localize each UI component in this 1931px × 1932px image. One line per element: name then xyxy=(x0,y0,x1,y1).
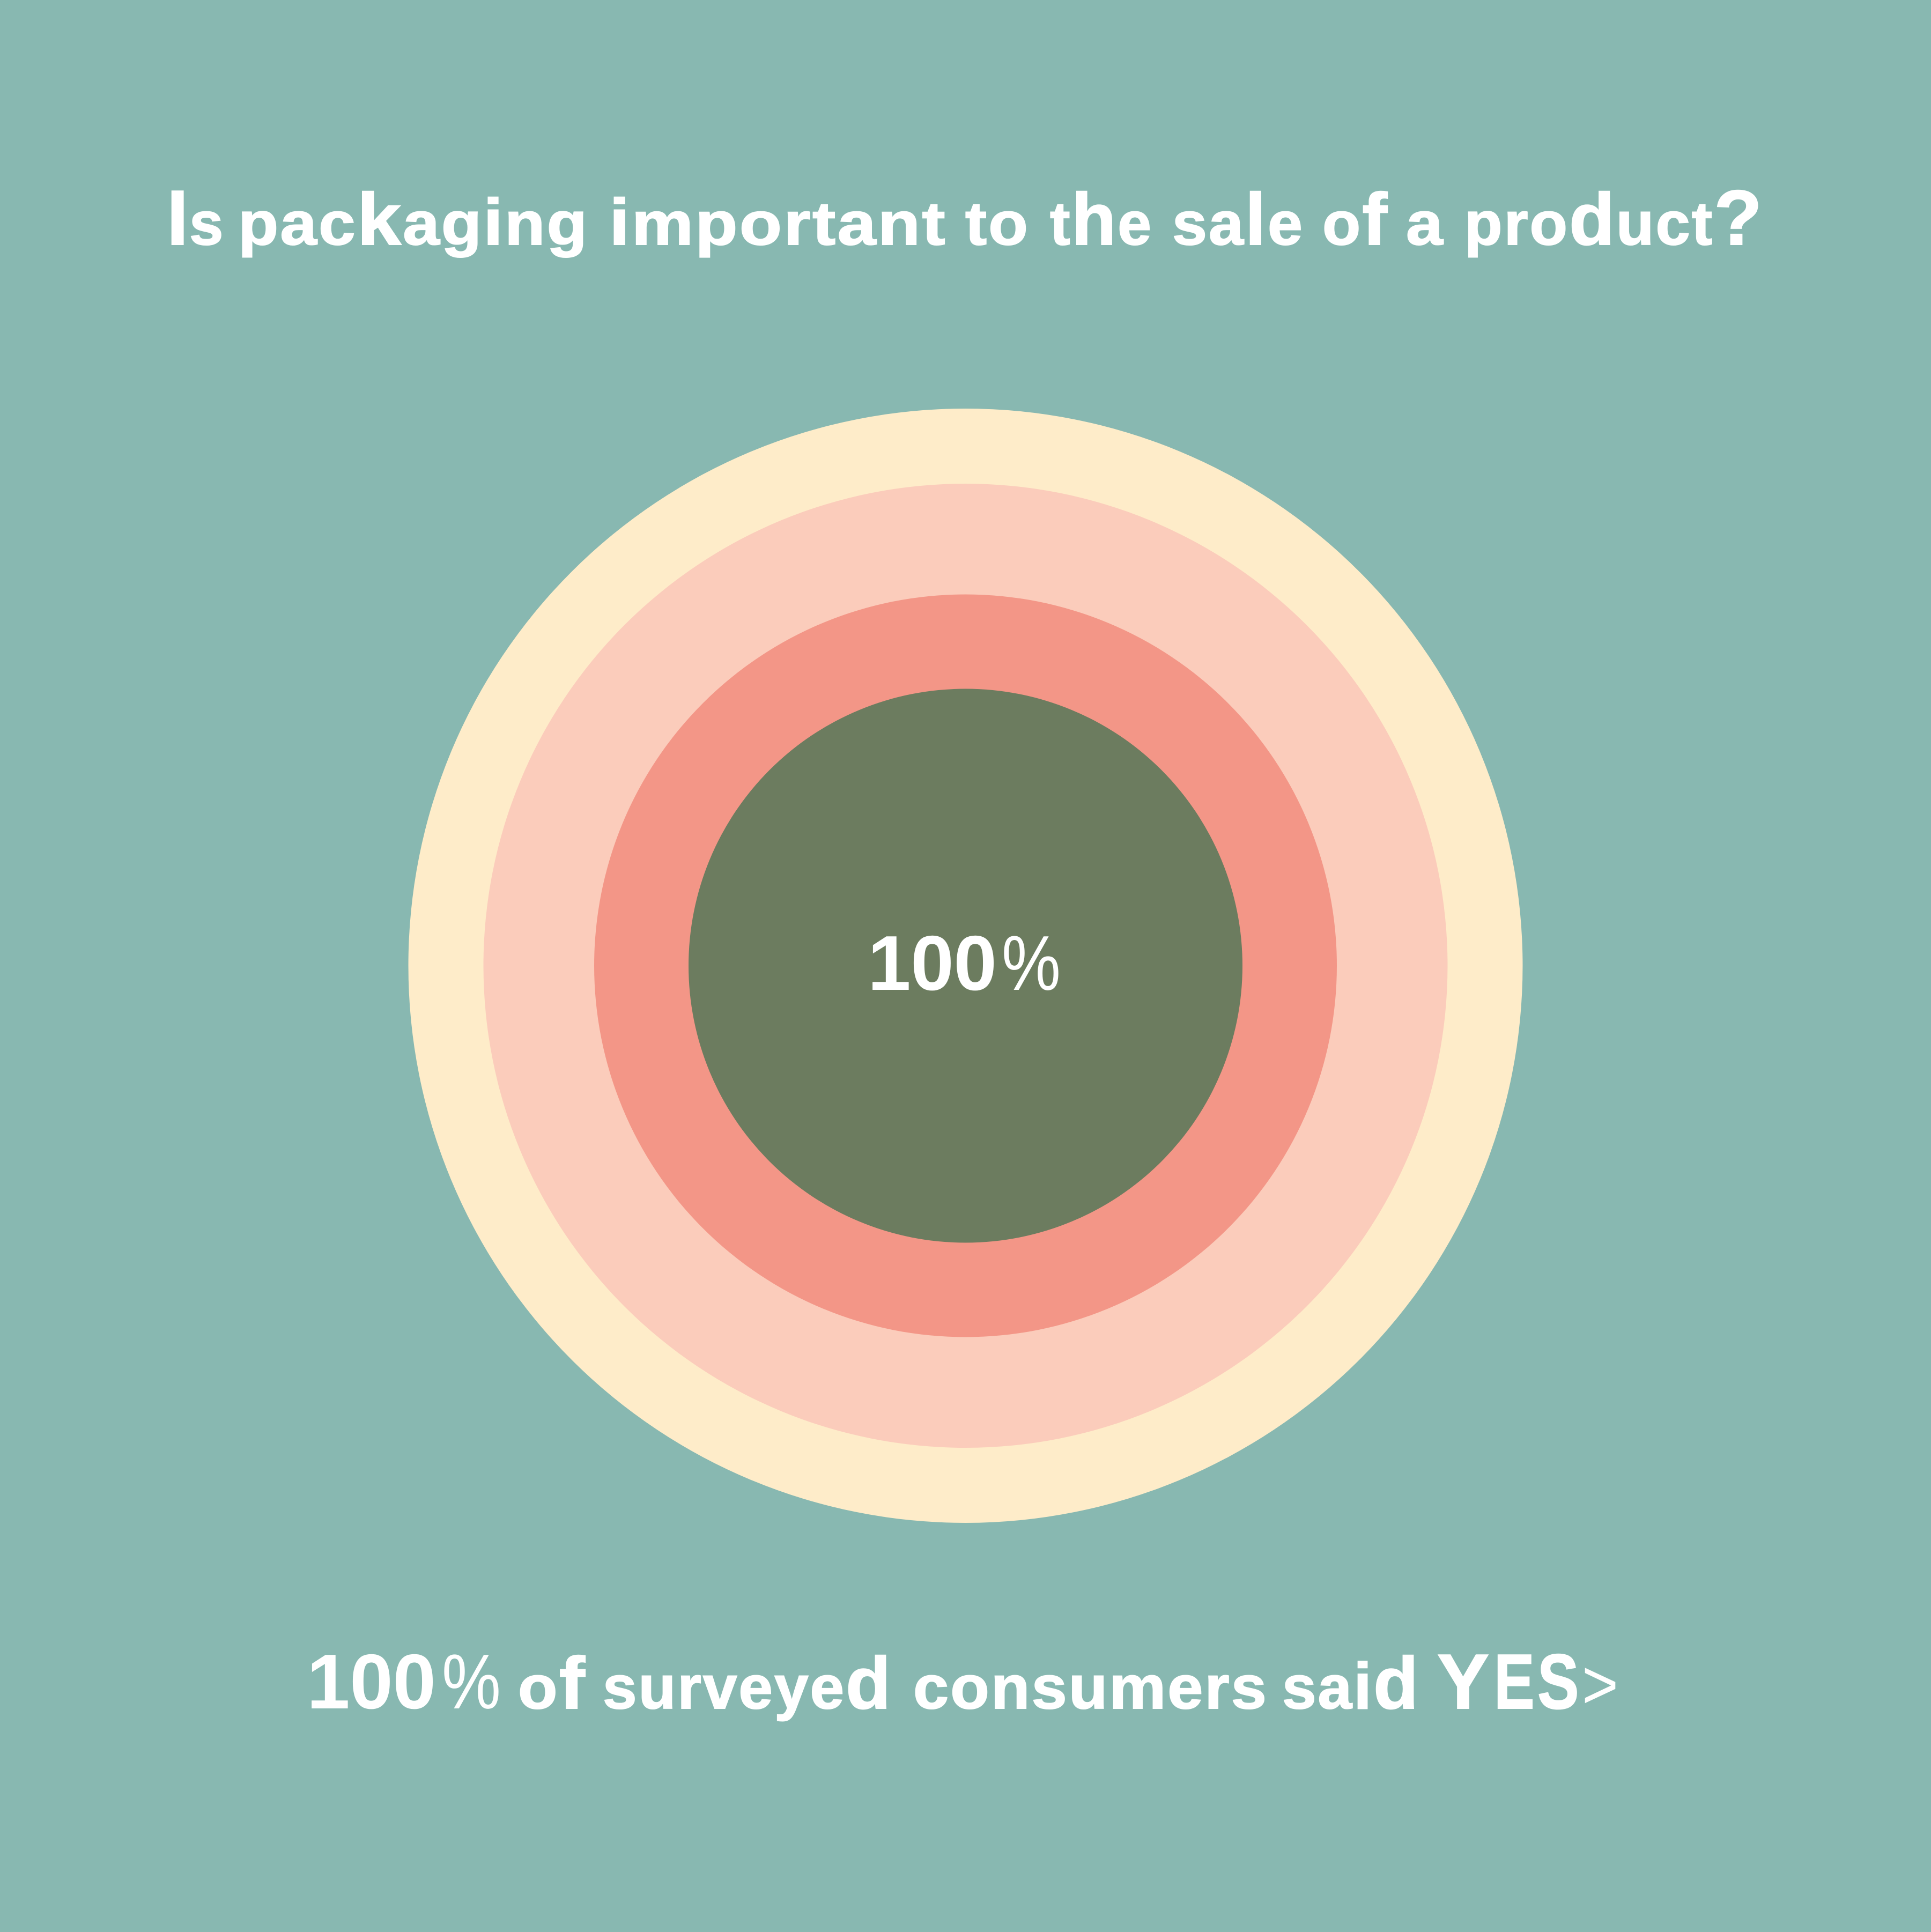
title: product? xyxy=(1464,174,1764,261)
conclusion text: consumers xyxy=(913,1654,1268,1722)
title: a xyxy=(1406,190,1445,258)
title: s xyxy=(189,190,225,258)
conclusion text: 100 xyxy=(307,1638,438,1725)
center value: 100%: 100 xyxy=(868,920,998,1006)
inner circle xyxy=(689,689,1242,1243)
title: to xyxy=(965,190,1030,258)
conclusion text: of xyxy=(518,1642,587,1724)
title: of xyxy=(1322,179,1389,261)
title: I xyxy=(167,174,190,261)
conclusion text: % xyxy=(442,1638,501,1725)
conclusion text: > xyxy=(1582,1645,1618,1723)
conclusion text: S xyxy=(1537,1638,1580,1725)
title: packaging xyxy=(238,179,589,261)
second circle xyxy=(484,484,1448,1448)
conclusion text: E xyxy=(1494,1638,1536,1725)
conclusion text xyxy=(307,1638,1618,1725)
title xyxy=(167,174,1764,261)
conclusion text: surveyed xyxy=(603,1642,892,1724)
title: sale xyxy=(1172,179,1304,261)
outer circle xyxy=(409,409,1523,1523)
center value: 100% xyxy=(868,920,1061,1006)
center value: 100%: % xyxy=(1002,920,1061,1006)
title: the xyxy=(1050,179,1153,261)
conclusion text: said xyxy=(1282,1642,1420,1724)
third circle xyxy=(594,594,1337,1337)
concentric circle chart xyxy=(409,409,1523,1523)
conclusion text: Y xyxy=(1437,1638,1491,1725)
title: important xyxy=(609,186,947,258)
